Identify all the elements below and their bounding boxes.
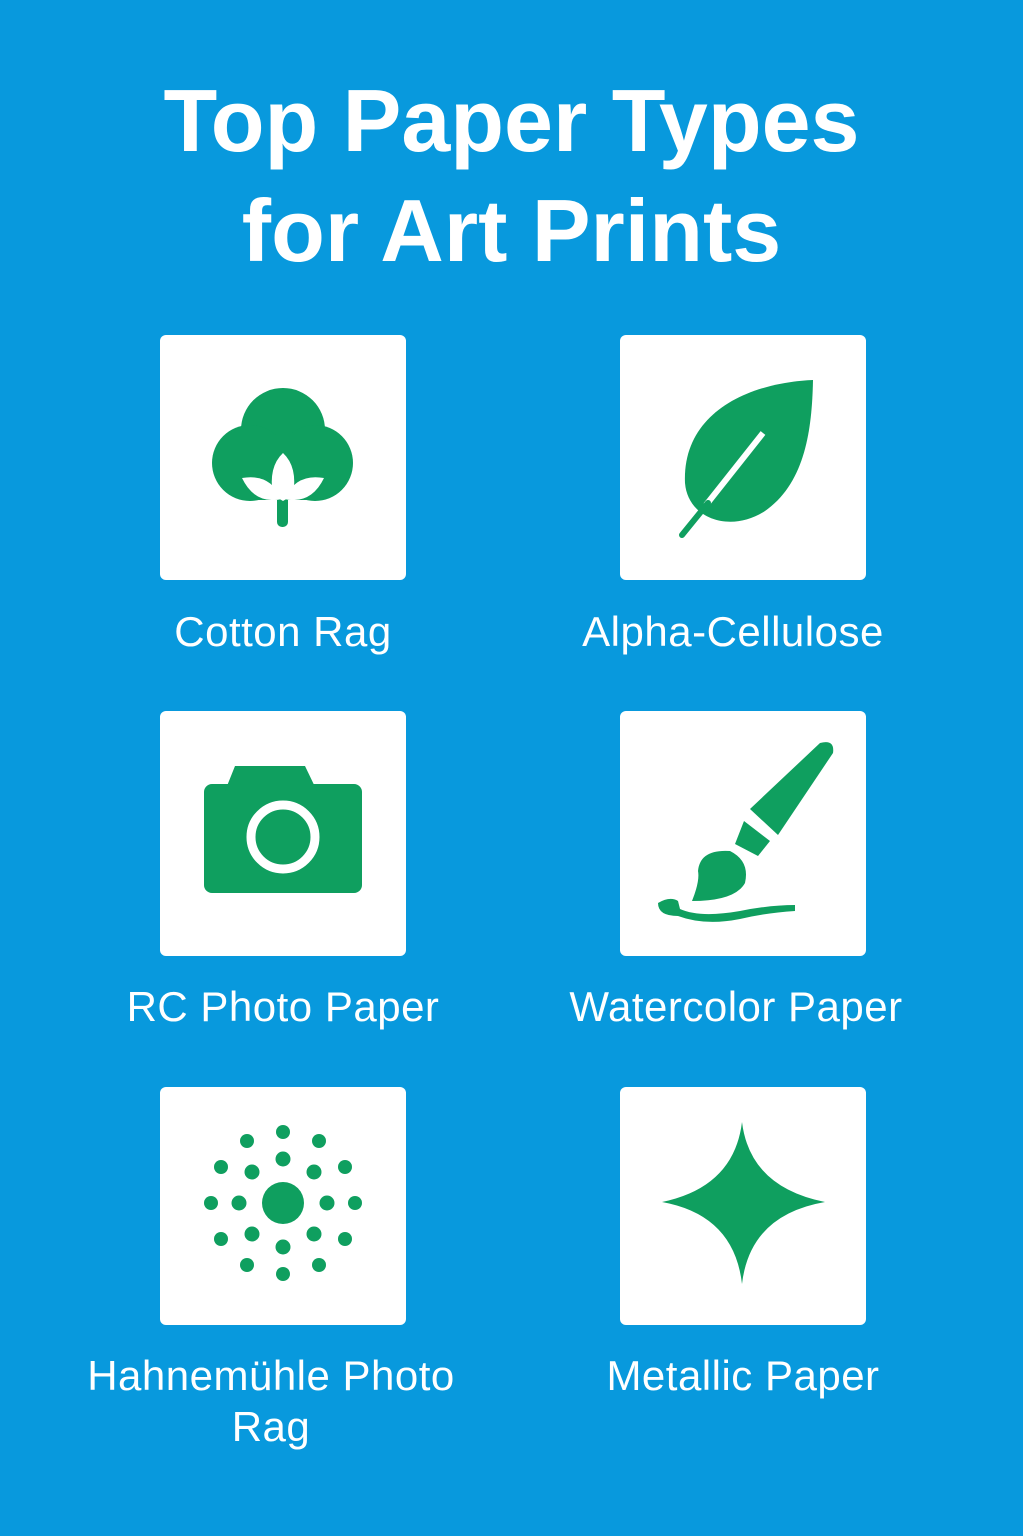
icon: cotton: [212, 388, 353, 527]
label: watercolor paper: Watercolor Paper: [569, 983, 903, 1030]
icon: camera: [204, 766, 362, 893]
icon: leaf: [679, 380, 813, 538]
card: cotton rag: [160, 335, 406, 580]
label: hahnemuhle photo rag: Rag: [232, 1403, 310, 1450]
label: metallic paper: Metallic Paper: [606, 1352, 880, 1399]
title: [163, 71, 860, 280]
icon: dot burst: [204, 1125, 362, 1281]
label: cotton rag: Cotton Rag: [174, 608, 392, 655]
icon: sparkle star: [662, 1122, 825, 1284]
card: watercolor paper: [620, 711, 866, 956]
card: alpha-cellulose: [620, 335, 866, 580]
label: hahnemuhle photo rag: [87, 1352, 455, 1450]
card: rc photo paper: [160, 711, 406, 956]
icon: paintbrush: [658, 742, 834, 922]
label: rc photo paper: RC Photo Paper: [127, 983, 439, 1030]
card: hahnemuhle photo rag: [160, 1087, 406, 1325]
label: alpha-cellulose: Alpha-Cellulose: [582, 608, 884, 655]
card: metallic paper: [620, 1087, 866, 1325]
title: for Art Prints: [242, 181, 781, 280]
label: hahnemuhle photo rag: Hahnemühle Photo: [87, 1352, 455, 1399]
title: Top Paper Types: [163, 71, 860, 170]
